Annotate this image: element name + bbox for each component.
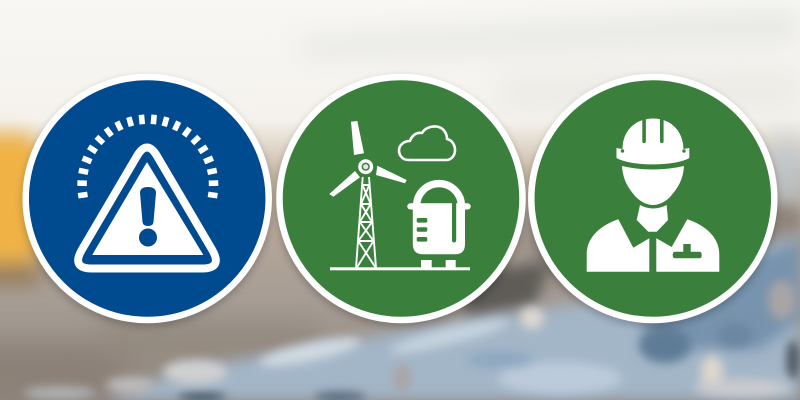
panel: warning badge xyxy=(26,77,269,320)
icon: equipment tank xyxy=(407,184,471,268)
icon: cloud xyxy=(399,126,455,160)
panel: wind turbine and equipment badge xyxy=(280,77,522,320)
icon: wind turbine xyxy=(329,121,407,268)
panel: worker badge xyxy=(531,77,774,320)
ground line xyxy=(330,267,470,270)
icon: hard hat worker xyxy=(587,118,719,272)
badge disc: green xyxy=(531,77,774,320)
icon: warning triangle xyxy=(78,148,216,268)
badge disc: blue xyxy=(26,77,269,320)
badge disc: green xyxy=(280,77,522,320)
icon: gauge tick arc xyxy=(77,115,218,199)
